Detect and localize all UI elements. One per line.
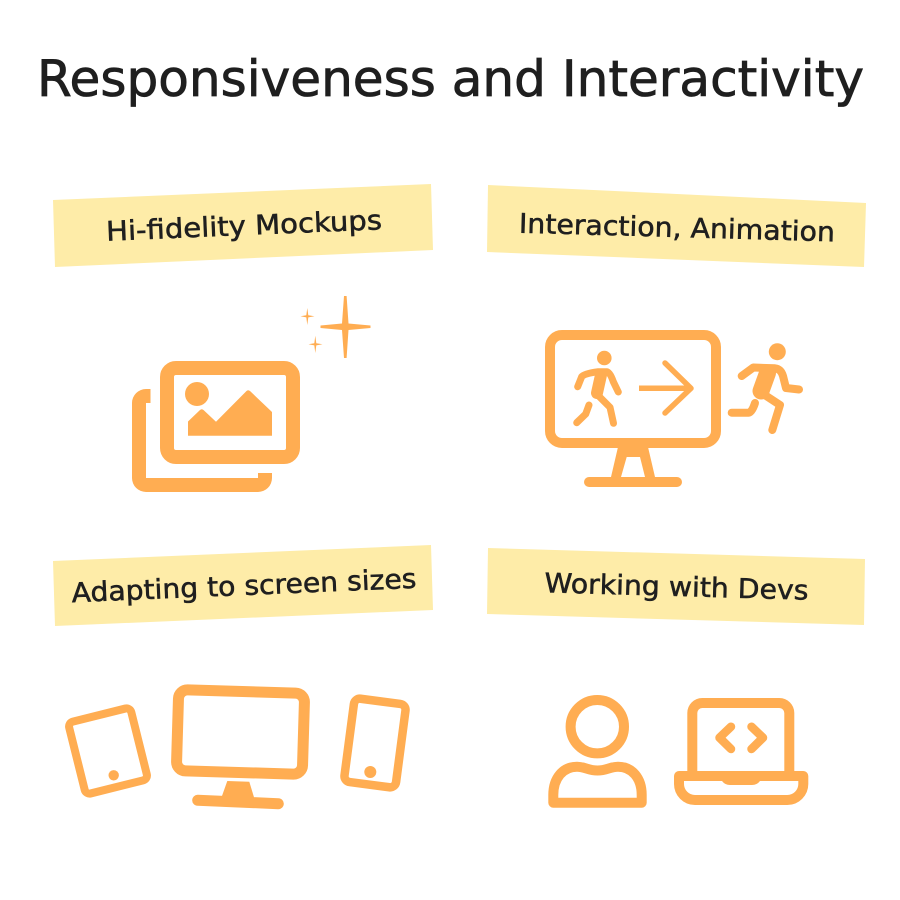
label background: adapting to screen sizes (53, 545, 433, 626)
label background: working with devs (487, 548, 865, 625)
label background: hi-fidelity mockups (53, 184, 433, 267)
panel: adapting to screen sizes (53, 545, 433, 804)
panel: working with devs (487, 548, 865, 803)
icon: person and laptop with code (553, 700, 803, 803)
heading: working with devs: Working with Devs (544, 568, 809, 607)
heading: adapting to screen sizes: Adapting to screen sizes (71, 564, 417, 609)
label background: interaction, animation (487, 185, 866, 267)
icon: image gallery with sparkles (132, 296, 370, 492)
icon: tablet, monitor and phone (68, 690, 406, 804)
heading: interaction, animation: Interaction, Animation (519, 209, 835, 248)
panel: interaction, animation (487, 185, 866, 482)
icon: monitor with walking and running figures (550, 335, 799, 482)
panel: hi-fidelity mockups (53, 184, 433, 492)
heading: hi-fidelity mockups: Hi-fidelity Mockups (105, 205, 383, 248)
title: Responsiveness and Interactivity (37, 50, 864, 108)
